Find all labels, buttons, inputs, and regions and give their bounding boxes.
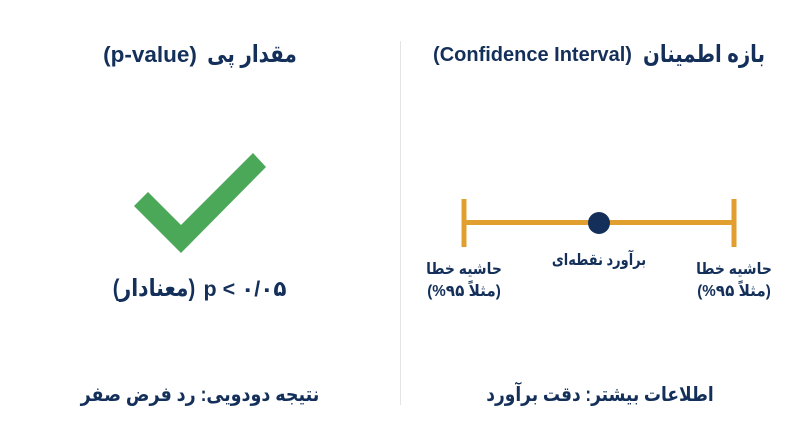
vertical divider — [400, 41, 401, 405]
label: left margin of error: حاشیه خطا — [426, 261, 502, 278]
heading: p-value: (p-value) — [103, 42, 197, 67]
heading: confidence interval: بازه اطمینان — [643, 41, 765, 68]
label: right margin of error — [696, 261, 772, 300]
heading: p-value: مقدار پی — [207, 41, 297, 68]
p-value result — [113, 275, 286, 302]
label: right margin of error: (مثلاً ۹۵%) — [697, 283, 771, 300]
heading: p-value — [103, 41, 297, 68]
footer: two-sided result: نتیجه دودویی: رد فرض صفر — [81, 384, 319, 406]
label: right margin of error: حاشیه خطا — [696, 261, 772, 278]
label: point estimate: برآورد نقطه‌ای — [552, 252, 646, 269]
heading: confidence interval — [433, 41, 765, 68]
label: left margin of error: (مثلاً ۹۵%) — [427, 283, 501, 300]
p-value result: p < ۰/۰۵ — [204, 277, 286, 301]
p-value result: (معنادار) — [113, 275, 195, 302]
footer: more information: اطلاعات بیشتر: دقت برآورد — [486, 384, 714, 406]
heading: confidence interval: (Confidence Interval) — [433, 44, 632, 66]
label: left margin of error — [426, 261, 502, 300]
